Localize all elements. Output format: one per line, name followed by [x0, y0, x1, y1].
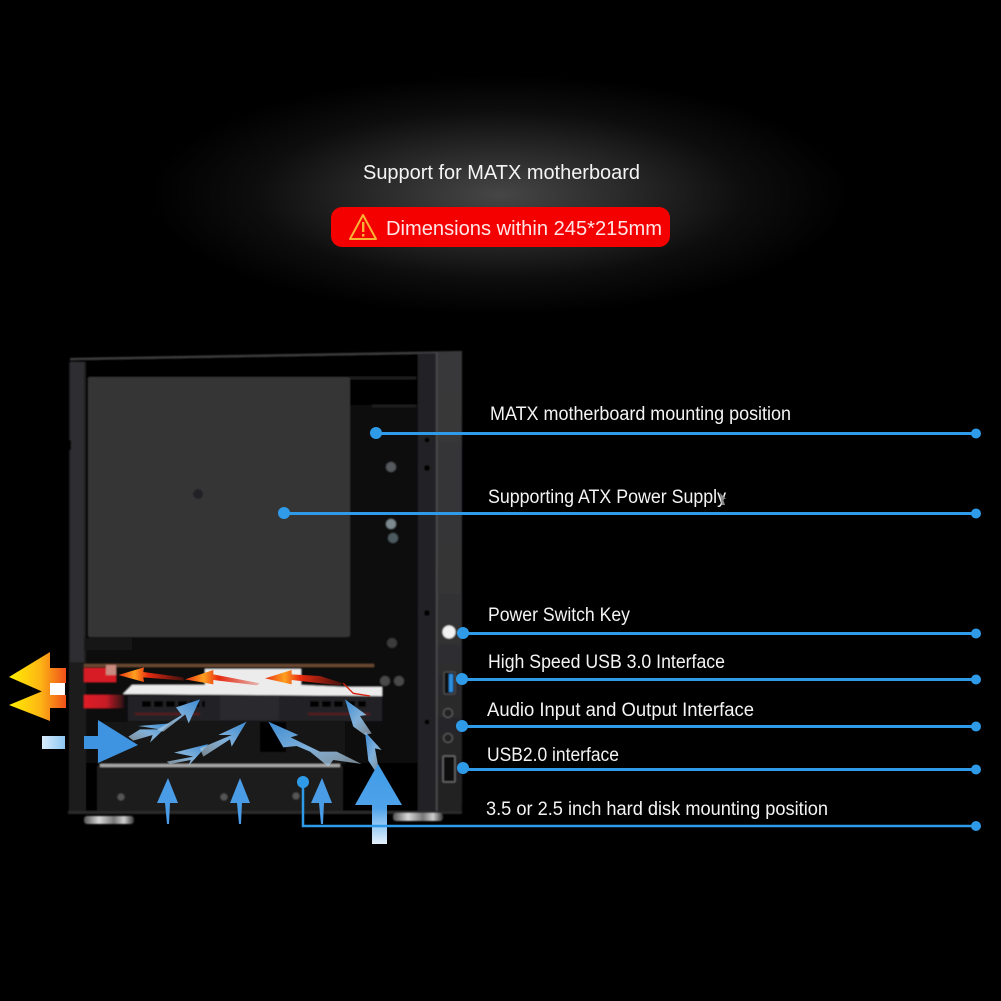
hot air flow arrows inside — [118, 667, 370, 696]
callout: MATX motherboard mounting position: MATX motherboard mounting position — [490, 404, 791, 425]
right front posts — [418, 352, 462, 813]
callout: audio input and output interface — [456, 700, 981, 732]
case interior — [68, 352, 462, 813]
callout: hard disk mounting position: 3.5 or 2.5 inch hard disk mounting position — [486, 799, 828, 820]
heading: support for MATX motherboard: Support for MATX motherboard — [363, 162, 640, 184]
intake arrows: bottom — [157, 764, 402, 844]
callout: supporting ATX power supply — [278, 487, 981, 519]
plate screw — [193, 489, 203, 499]
hard disk — [97, 764, 343, 812]
intake arrow: left — [42, 720, 138, 763]
callout: power switch key: Power Switch Key — [488, 605, 630, 626]
callout: MATX motherboard mounting position — [370, 404, 981, 439]
case top edge — [70, 351, 462, 360]
case feet — [84, 813, 443, 824]
power supply plate — [88, 377, 350, 637]
callout: USB2.0 interface — [457, 745, 981, 774]
callout: hard disk mounting position — [297, 776, 981, 831]
front ports — [442, 626, 456, 782]
graphics card shroud — [123, 669, 382, 721]
cool air flow arrows inside — [128, 699, 382, 773]
badge text: Dimensions within 245*215mm — [386, 218, 662, 240]
icon: warning triangle — [350, 215, 376, 239]
motherboard area — [84, 638, 418, 764]
red exhaust glow — [84, 668, 116, 682]
callout: power switch key — [457, 605, 981, 639]
PC case illustration — [66, 351, 462, 865]
top glow background — [150, 75, 850, 315]
graphics card PCB — [84, 664, 374, 667]
callout: supporting ATX power supply: Supporting ATX Power Supply — [488, 487, 726, 508]
callout: USB2.0 interface: USB2.0 interface — [487, 745, 619, 766]
callout: audio input and output interface: Audio Input and Output Interface — [487, 700, 754, 721]
callout: high speed USB 3.0 interface — [456, 652, 981, 685]
warning badge — [331, 207, 670, 247]
callout: high speed USB 3.0 interface: High Speed USB 3.0 Interface — [488, 652, 725, 673]
floor reflection — [66, 832, 458, 865]
case bottom rail — [68, 811, 462, 814]
left post — [67, 362, 86, 813]
exhaust arrows: hot air out — [9, 652, 66, 721]
cables behind plate — [350, 378, 418, 640]
